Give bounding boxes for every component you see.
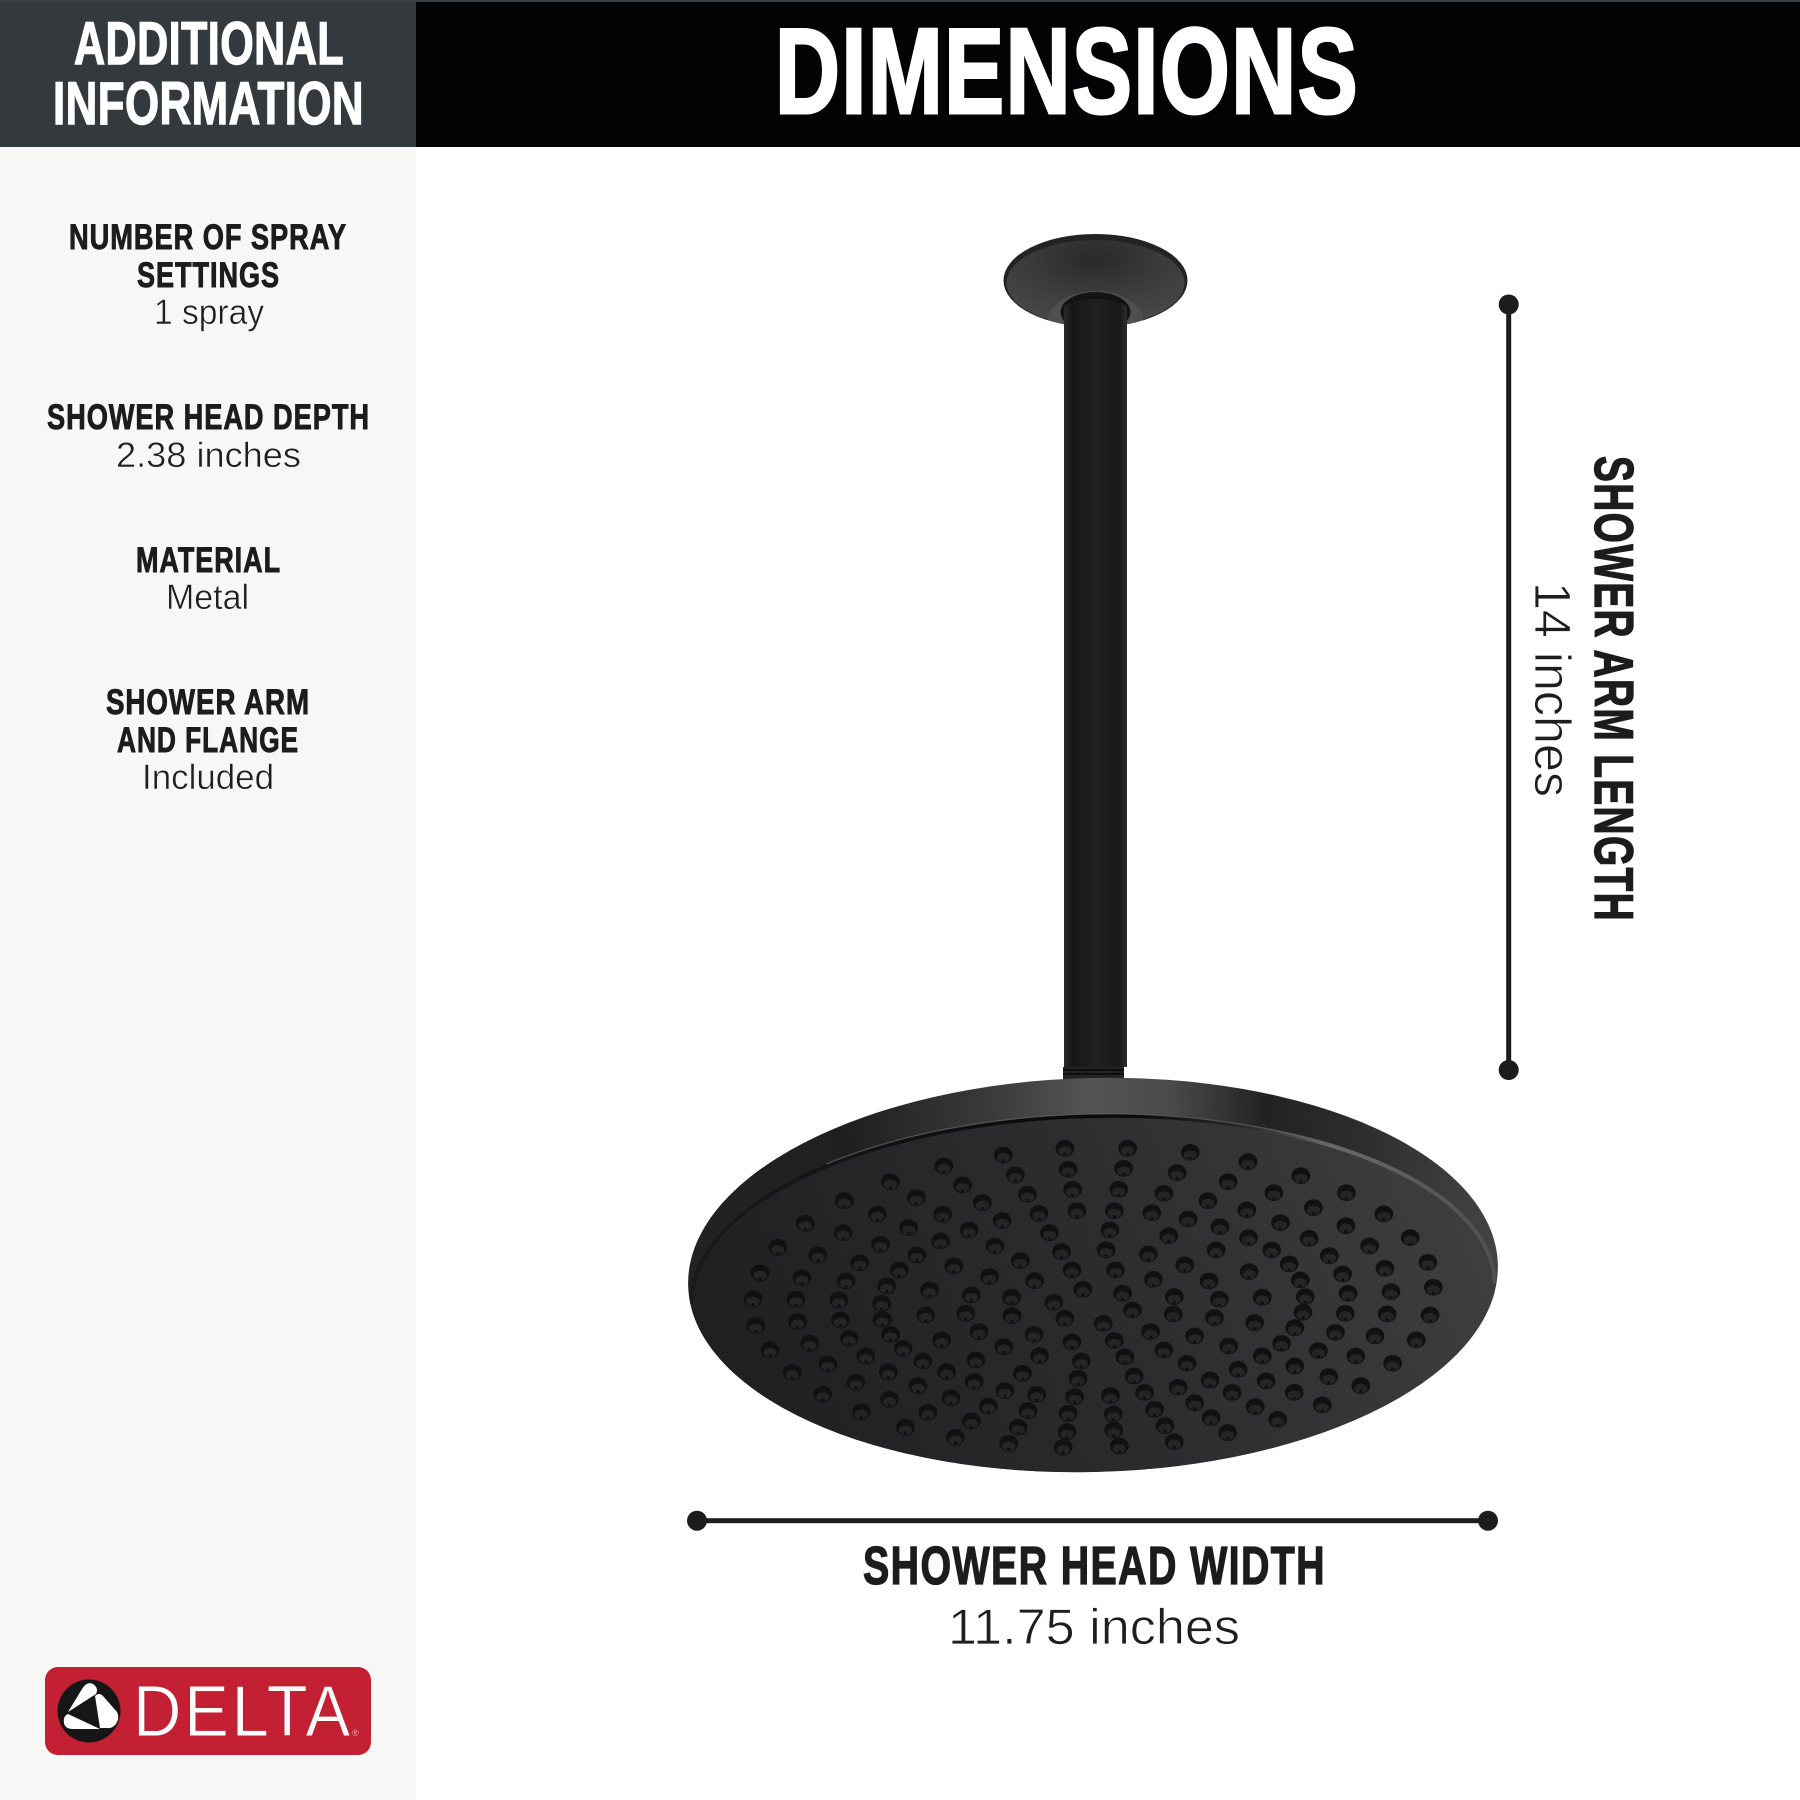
product: ceiling shower arm and rain shower head: [683, 234, 1503, 1483]
sidebar heading: INFORMATION: [53, 70, 364, 137]
arm length label: SHOWER ARM LENGTH: [1583, 456, 1645, 922]
dimension: shower head width: [687, 1511, 1498, 1655]
spec: material: [136, 540, 281, 617]
spec: shower head depth: [47, 397, 370, 475]
title bar: dimensions: DIMENSIONS: [775, 3, 1359, 139]
spec: material: Metal: [166, 578, 249, 617]
panel: additional information sidebar: [0, 0, 416, 1800]
shower head: [683, 1067, 1503, 1483]
spec: number of spray settings: NUMBER OF SPRAY: [69, 217, 347, 257]
arm length value: 14 inches: [1524, 582, 1581, 797]
logo: Delta: DELTA: [133, 1672, 353, 1752]
spec: shower arm and flange: AND FLANGE: [117, 720, 299, 760]
vertical measure line: [1499, 294, 1519, 1080]
spec: shower head depth: 2.38 inches: [116, 436, 301, 475]
head width label: SHOWER HEAD WIDTH: [863, 1536, 1326, 1596]
title bar: dimensions: [0, 0, 1800, 147]
dimension: shower arm length: [1499, 294, 1645, 1080]
sidebar heading: ADDITIONAL: [74, 10, 344, 77]
shower arm: [1063, 299, 1127, 1081]
spec: shower arm and flange: Included: [142, 758, 274, 797]
spec: shower arm and flange: SHOWER ARM: [106, 682, 310, 722]
spec: material: MATERIAL: [136, 540, 281, 580]
logo: Delta: [45, 1667, 371, 1755]
spec: shower arm and flange: [106, 682, 310, 797]
spec: number of spray settings: 1 spray: [154, 293, 264, 332]
head width value: 11.75 inches: [948, 1599, 1240, 1655]
flange: [1004, 234, 1188, 324]
spec: number of spray settings: [69, 217, 347, 332]
sidebar heading: [0, 0, 416, 147]
spray nozzles: [744, 1140, 1443, 1456]
logo: Delta: ®: [352, 1728, 359, 1738]
spec: shower head depth: SHOWER HEAD DEPTH: [47, 397, 370, 437]
horizontal measure line: [687, 1511, 1498, 1531]
spec: number of spray settings: SETTINGS: [137, 255, 280, 295]
